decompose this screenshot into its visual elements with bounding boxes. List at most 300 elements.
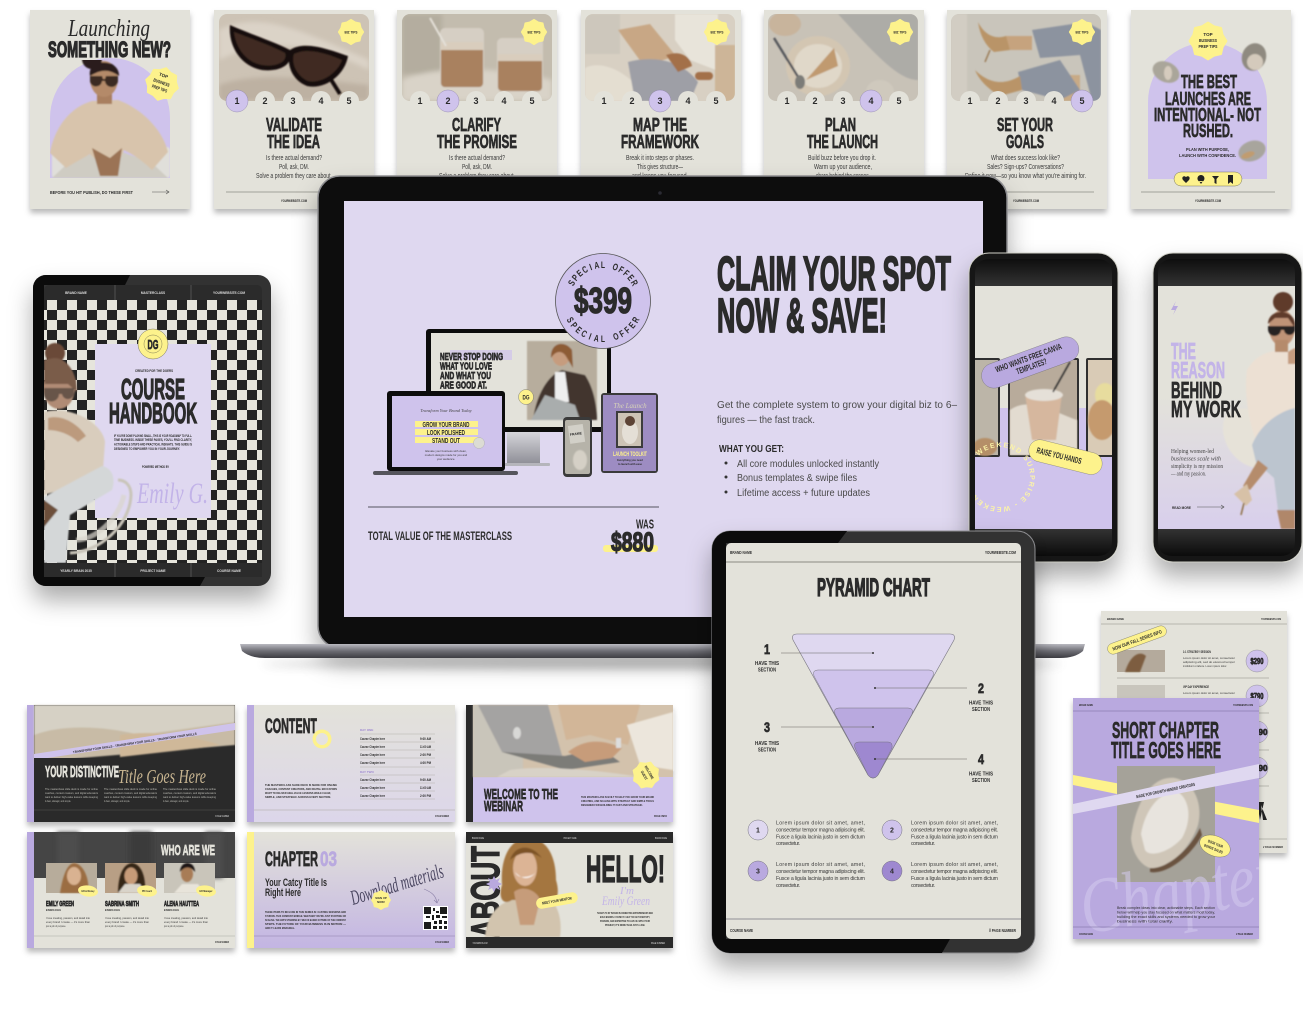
pill: new fall series: NOW OUR FALL SERIES INFO <box>1112 629 1163 653</box>
stamp text top: L <box>601 260 605 270</box>
circular slogan: SE - WEEKEND SURPRISE - WEEKEND <box>975 442 1035 512</box>
heading <box>109 374 197 430</box>
read more link <box>1172 505 1224 510</box>
badge: biz tips <box>888 20 912 44</box>
three text columns <box>45 787 216 803</box>
heading: FRAMEWORK <box>621 132 699 152</box>
signature: I'm <box>619 885 634 897</box>
body text: below will help you stay focused on what matters most today, <box>1117 910 1215 914</box>
body text: share behind the scenes. <box>816 173 870 180</box>
back page: pricing list <box>1101 611 1287 853</box>
was price <box>603 518 658 557</box>
photo: iced coffee glasses <box>402 14 552 101</box>
yellow pill <box>1028 440 1102 475</box>
three text columns: coaches, content creators, and digital educators <box>45 791 98 795</box>
body text: STEPS. THE FUTURE OF YOUR BUSINESS IS IN MOTION — <box>265 922 346 926</box>
body text: business with total clarity. <box>1117 920 1173 924</box>
label 1 <box>755 641 779 674</box>
signature <box>601 885 650 908</box>
mini laptop: your audience. <box>437 457 455 461</box>
label 1: 1 <box>764 641 770 657</box>
label 1: HAVE THIS <box>755 661 779 667</box>
stamp text bottom: F <box>623 325 632 336</box>
team member 1: HR & Money <box>82 889 95 893</box>
heading <box>807 115 878 152</box>
legend item 2: 2 <box>890 828 894 834</box>
mini tablet: The Launch <box>613 402 647 410</box>
heading: MY WORK <box>1171 396 1241 422</box>
back page: pricing list: // PAGE NUMBER <box>1263 845 1284 849</box>
subheading: Right Here <box>265 887 301 899</box>
seal: DG: DG <box>148 337 158 352</box>
top navigation: MASTERCLASS <box>141 291 165 295</box>
panel: slide welcome to the webinar: PAGE INFO <box>654 814 668 818</box>
mini monitor headline <box>440 350 512 392</box>
read more link: READ MORE <box>1172 505 1191 510</box>
stamp text bottom: E <box>627 320 638 331</box>
top navigation: YOURWEBSITE.COM <box>213 291 245 295</box>
bottom navigation <box>44 563 262 577</box>
agenda list: 11:00 AM <box>420 786 431 790</box>
header: YOURWEBSITE.COM <box>985 550 1016 555</box>
row one: adipiscing elit, sed do eiusmod tempor <box>1183 660 1235 664</box>
team member 1: I love creating, passion, and detail into <box>46 916 90 920</box>
step numbers: 3 <box>290 96 296 106</box>
panel: cover social card <box>30 10 190 209</box>
agenda list: 9:00 AM <box>420 778 431 782</box>
agenda list: DAY ONE <box>360 728 373 732</box>
team member 2: just a job of purpose. <box>104 924 125 928</box>
seal: GUEST <box>640 770 648 781</box>
price stamp: $399 <box>574 280 632 321</box>
step numbers: 5 <box>529 96 535 106</box>
mini laptop <box>373 391 518 475</box>
legend item 4: Fusce a ligula lacinia justo in sem dictum <box>911 876 998 882</box>
footer <box>226 192 362 203</box>
heading: BEHIND <box>1171 377 1222 403</box>
team member 1: just a job of purpose. <box>45 924 66 928</box>
stamp text bottom: C <box>579 328 589 340</box>
three text columns: The masterclass slide deck is made for online <box>45 787 98 791</box>
mini laptop: Transform Your Brand Today <box>420 408 472 413</box>
agenda list: Course Chapter here <box>360 745 385 749</box>
mini laptop: modern designs made for you and <box>425 453 468 457</box>
three text columns: want to deliver high-value lessons while keeping <box>45 795 98 799</box>
leader lines <box>781 653 967 759</box>
team member 1 <box>45 863 99 928</box>
heading: SOMETHING NEW? <box>48 37 171 62</box>
mini laptop: Elevate your business with clean, <box>425 449 467 453</box>
step numbers: 4 <box>1051 96 1057 106</box>
footer: // PAGE NUMBER <box>215 940 229 944</box>
badge: biz tips: BIZ TIPS <box>710 30 724 34</box>
cover panel: POWERED METHOD BY <box>142 465 170 469</box>
legend item 3: consectetur tempor magna adipiscing elit. <box>776 869 865 875</box>
stamp text top: O <box>611 262 620 273</box>
body text: THANK'S TO MY PASSION IN CONNECTING ENTREPRENEURS WHO <box>597 911 653 915</box>
seal: NOW! <box>377 900 385 904</box>
mini tablet: to launch with ease <box>618 462 643 466</box>
panel: phone with about post <box>1153 253 1302 562</box>
heading: COURSE <box>121 374 185 406</box>
body text <box>114 434 192 451</box>
header: BRAND NAME <box>730 550 752 555</box>
intro text: COACHES, CONTENT CREATORS, AND DIGITAL EDUCATORS <box>265 787 337 791</box>
stamp text bottom: I <box>587 332 593 342</box>
panel: course handbook tablet <box>33 275 271 586</box>
heading: THE IDEA <box>267 132 320 152</box>
heading: THE LAUNCH <box>807 132 878 152</box>
legend item 2 <box>882 820 998 847</box>
yellow badge: BONUS SALES <box>1203 843 1224 855</box>
heading: HELLO! <box>586 849 665 891</box>
body text <box>439 155 515 180</box>
step numbers <box>594 90 726 112</box>
step numbers: 5 <box>896 96 902 106</box>
badge: top business prep tips: BUSINESS <box>1199 38 1217 43</box>
body text: STUDIOS. THIS COMPANY BRIDGE. WHETHER YOU'RE JUST STARTING OR <box>265 914 347 918</box>
footer <box>592 192 728 203</box>
badge: top business prep tips <box>1190 22 1226 60</box>
step numbers: 1 <box>417 96 423 106</box>
label 4 <box>969 751 993 784</box>
legend item 3: 3 <box>756 868 760 876</box>
team member 3 <box>163 863 217 928</box>
heading: PLAN <box>825 115 856 135</box>
step numbers: 2 <box>629 96 635 106</box>
purple pill: WHO WANTS FREE CANVA <box>994 341 1063 374</box>
panel: closing social card <box>1131 10 1291 209</box>
stamp text top: P <box>570 273 581 283</box>
label 2: 2 <box>978 680 984 696</box>
row one: incididunt ut labore. Lorem ipsum dolor. <box>1183 664 1227 668</box>
seal: SIGN UP <box>375 896 387 900</box>
step numbers: 3 <box>473 96 479 106</box>
three text columns: it clear, strategic, and simple. <box>104 799 130 803</box>
panel: slide who are we <box>27 832 235 948</box>
body text: Define it now—so you know what you're aiming for. <box>965 173 1086 180</box>
label 3: HAVE THIS <box>755 741 779 747</box>
team member 3: just a job of purpose. <box>163 924 184 928</box>
body text: Sales? Sign-ups? Conversations? <box>987 164 1064 171</box>
camera <box>658 191 662 195</box>
team member 1: every brand I create — it's more than <box>46 920 90 924</box>
body text: What does success look like? <box>991 155 1060 162</box>
bottom bar <box>466 937 673 948</box>
slide heading: NOW & SAVE! <box>717 290 887 343</box>
bottom bar: YOURWEBSITE.COM <box>472 941 488 945</box>
step numbers: 3 <box>657 96 663 106</box>
three text columns: The masterclass slide deck is made for online <box>163 787 216 791</box>
agenda list: DAY TWO <box>360 770 375 774</box>
mini monitor photo <box>527 341 597 420</box>
body text: Break complex ideas into clear, actionable steps. Each section <box>1117 906 1215 910</box>
row one <box>1117 650 1268 672</box>
intro text: THE MASTERCLASS SLIDE DECK IS MADE FOR ONLINE <box>265 783 337 787</box>
mini monitor <box>426 329 611 466</box>
what you get list: Lifetime access + future updates <box>737 488 870 499</box>
heading: CONTENT <box>265 715 317 738</box>
signature: Emily G. <box>136 477 208 510</box>
body text: Poll, ask, DM. <box>279 164 309 171</box>
badge: biz tips: BIZ TIPS <box>344 30 358 34</box>
heading <box>1171 342 1242 418</box>
step numbers <box>960 90 1093 112</box>
team member 3: I love creating, passion, and detail into <box>164 916 208 920</box>
mini tablet: LAUNCH TOOLKIT <box>613 452 647 458</box>
heading <box>621 115 699 152</box>
legend item 2: consectetur tempor magna adipiscing elit. <box>911 828 998 834</box>
legend item 3: Lorem ipsum dolor sit amet, amet, <box>776 862 865 868</box>
photo tiles <box>975 358 1112 457</box>
body text: Is there actual demand? <box>449 155 505 162</box>
photo: plate with cake <box>768 12 918 104</box>
body text <box>1117 906 1216 924</box>
bottom navigation: COURSE NAME <box>217 569 241 573</box>
badge: top business prep tips: PREP TIPS <box>151 84 168 94</box>
legend item 1: Lorem ipsum dolor sit amet, amet, <box>776 820 865 826</box>
legend item 1 <box>748 820 865 847</box>
heading <box>1154 72 1261 141</box>
team member 3: BUSINESS COACH <box>164 908 179 912</box>
front page: chapter title: COURSE NAME <box>1079 932 1093 936</box>
agenda list <box>360 728 435 799</box>
step numbers: 5 <box>346 96 352 106</box>
top bar <box>466 832 673 843</box>
badge: biz tips: BIZ TIPS <box>894 30 907 34</box>
stamp text bottom <box>564 315 642 344</box>
yellow pill: RAISE YOU HANDS <box>1036 445 1083 466</box>
body text: BUILD BRANDS. I FOUND IT. I HELP YOU GET CREATIVITY, <box>600 915 650 919</box>
step numbers: 4 <box>685 96 691 106</box>
step numbers: 1 <box>601 96 607 106</box>
offer description <box>717 400 957 426</box>
footer: YOURWEBSITE.COM <box>1013 199 1039 203</box>
phone screen <box>975 286 1112 529</box>
side strip <box>247 832 254 948</box>
step numbers: 4 <box>868 96 874 106</box>
heading <box>45 764 206 788</box>
mini seal: DG <box>522 394 530 402</box>
heading <box>484 786 558 815</box>
heading <box>437 115 517 152</box>
team member 1: EMILY GREEN <box>46 901 74 908</box>
step numbers: 2 <box>995 96 1001 106</box>
body text: PROJECT, IT'S MORE THAN JUST A JOB. <box>605 923 645 927</box>
chart title: PYRAMID CHART <box>817 574 930 602</box>
step numbers <box>777 90 909 112</box>
body text: Helping women-led <box>1171 448 1215 455</box>
heading: 03 <box>320 848 337 871</box>
mini laptop: GROW YOUR BRAND <box>422 420 470 429</box>
heading: THE <box>1171 338 1196 364</box>
bottom navigation: YEARLY BRAIN 2035 <box>60 569 92 573</box>
laptop body <box>318 176 1007 648</box>
stamp text bottom: O <box>612 331 621 343</box>
label 4: 4 <box>978 751 984 767</box>
lavender arch <box>1148 43 1267 179</box>
legend item 4: consectetur tempor magna adipiscing elit. <box>911 869 998 875</box>
bolt icon <box>1171 301 1178 315</box>
top bar: BRAND NAME <box>472 836 484 840</box>
body text: CREATING, AND SCALING WITH STRATEGY AND SIMPLE TOOLS <box>581 799 654 803</box>
photo: seated woman in heels <box>1223 292 1297 529</box>
label 3 <box>755 719 779 754</box>
row one: Lorem ipsum dolor sit amet, consectetur <box>1183 656 1235 660</box>
panel: slide welcome to the webinar <box>466 705 673 822</box>
legend item 4: Lorem ipsum dolor sit amet, amet, <box>911 862 998 868</box>
body text <box>256 155 332 180</box>
front page: chapter title: YOURWEBSITE.COM <box>1233 703 1253 707</box>
photo: laptop on lap <box>585 14 735 101</box>
agenda list: Course Chapter here <box>360 761 385 765</box>
body text <box>597 911 653 927</box>
legend item 3: Fusce a ligula lacinia justo in sem dictum <box>776 876 865 882</box>
lavender band: MADE FOR GROWTH-MINDED CREATORS <box>1136 782 1196 799</box>
heading: MAP THE <box>633 115 687 135</box>
body text <box>965 155 1086 180</box>
top navigation <box>65 285 245 300</box>
body text: — and my passion. <box>1170 470 1206 478</box>
badge: top business prep tips: PREP TIPS <box>1198 44 1218 49</box>
what you get list: WHAT YOU GET: <box>719 444 784 455</box>
intro text <box>265 783 337 799</box>
heading: WHO ARE WE <box>161 842 215 859</box>
team member 2: SABRINA SMITH <box>105 901 139 908</box>
three text columns: it clear, strategic, and simple. <box>163 799 189 803</box>
team member 3: ALENA HAUTTEA <box>164 901 199 908</box>
mini tablet <box>601 393 658 473</box>
stamp text bottom: S <box>564 316 576 325</box>
yellow badge <box>1196 831 1234 861</box>
stamp text top: F <box>621 268 631 279</box>
top bar: BRAND NAME <box>655 836 667 840</box>
back page: pricing list: 90 <box>1259 728 1268 737</box>
stamp text top: I <box>588 262 593 272</box>
agenda list: 9:00 AM <box>420 737 431 741</box>
body text: LAUNCH WITH CONFIDENCE. <box>1179 153 1236 158</box>
label 3: 3 <box>764 719 770 735</box>
photo: sunglasses <box>219 14 369 101</box>
diagonal band: TRANSFORM YOUR SKILLS - TRANSFORM YOUR SKILLS - TRANSFORM YOUR SKILLS <box>73 732 197 754</box>
label 3: SECTION <box>758 748 776 754</box>
total value row: TOTAL VALUE OF THE MASTERCLASS <box>368 531 512 543</box>
heading <box>997 115 1053 152</box>
footer <box>775 192 911 203</box>
step numbers: 2 <box>262 96 268 106</box>
team member 2 <box>104 863 158 928</box>
legend item 1: consectetur. <box>776 841 800 847</box>
step numbers: 5 <box>713 96 719 106</box>
body text: THIS MASTERCLASS IS BUILT TO HELP YOU GROW YOUR BRAND <box>581 795 655 799</box>
QR code <box>423 906 448 930</box>
laptop screen <box>344 201 983 617</box>
vertical heading: ABOUT <box>464 846 508 938</box>
photo: smiling woman <box>485 838 561 937</box>
bottom navigation: PROJECT NAME <box>140 569 166 573</box>
body text: Is there actual demand? <box>266 155 322 162</box>
stamp text top: E <box>575 268 585 279</box>
footer <box>409 192 545 203</box>
step numbers: 1 <box>234 96 240 106</box>
body text: IF YOU'RE DONE PLAYING SMALL, THIS IS YOUR ROADMAP TO FULL- <box>114 434 192 438</box>
star accent <box>486 876 502 892</box>
panel: pyramid chart tablet <box>712 531 1035 953</box>
heading: WEBINAR <box>484 798 523 815</box>
yellow pill: MEET YOUR MENTOR <box>542 896 572 906</box>
footer: YOURWEBSITE.COM <box>464 199 490 203</box>
body text: and keeps you focused. <box>632 173 688 180</box>
mini monitor headline: ARE GOOD AT. <box>440 380 487 392</box>
body text: PASSION, AND EXPERTISE TO LIVE IN. WITH YOUR <box>600 919 651 923</box>
panel: phone with carousel <box>954 252 1134 592</box>
body text: Warm up your audience, <box>814 164 872 171</box>
row one: 1:1 STRATEGY SESSION <box>1183 650 1211 654</box>
step numbers: 2 <box>812 96 818 106</box>
stamp text top: E <box>625 273 636 283</box>
yellow band <box>1073 775 1259 823</box>
lavender arch <box>50 58 170 178</box>
agenda list: Course Chapter here <box>360 737 385 741</box>
footer: // PAGE NUMBER <box>215 814 229 818</box>
heading: Title Goes Here <box>118 766 206 788</box>
body text <box>626 155 694 180</box>
arrow <box>424 889 439 903</box>
subheading <box>265 877 327 899</box>
photo: woman in sweater <box>50 49 170 178</box>
row two: $790 <box>1250 692 1264 701</box>
yellow badge: BOOK YOUR <box>1207 839 1224 849</box>
what you get list <box>719 444 879 499</box>
panel: card 3 map the framework <box>578 10 744 176</box>
body text: ACTIONABLE STEPS AND PRACTICAL INSIGHTS. THIS GUIDE IS <box>114 442 192 446</box>
top navigation: BRAND NAME <box>65 291 87 295</box>
stamp text bottom: F <box>618 328 626 340</box>
checkerboard background <box>44 300 262 563</box>
seal <box>629 758 663 792</box>
lavender band <box>1073 764 1259 814</box>
photo: sofa <box>34 705 235 763</box>
badge: biz tips: BIZ TIPS <box>1076 30 1089 34</box>
back page: pricing list: 90 <box>1259 764 1268 773</box>
agenda list: 2:00 PM <box>420 794 431 798</box>
panel: card 1 validate the idea <box>214 10 374 209</box>
price stamp <box>556 254 650 348</box>
heading: REASON <box>1171 357 1225 383</box>
body text: Solve a problem they care about. <box>439 173 515 180</box>
icon row pill <box>1174 172 1242 186</box>
body text <box>808 155 876 180</box>
label 1: SECTION <box>758 668 776 674</box>
stamp text bottom: A <box>593 333 600 344</box>
footer <box>1141 192 1275 203</box>
step numbers: 4 <box>318 96 324 106</box>
legend item 4: consectetur. <box>911 883 935 889</box>
pill: new fall series <box>1106 624 1168 656</box>
legend item 4: 4 <box>890 868 894 876</box>
side strip <box>247 705 254 822</box>
laptop base <box>240 644 1085 668</box>
label 2: HAVE THIS <box>969 700 993 706</box>
back page: pricing list: YOURWEBSITE.COM <box>1261 617 1281 621</box>
agenda list: Course Chapter here <box>360 794 385 798</box>
body text: This gives structure— <box>637 164 683 171</box>
body text: DESIGNED TO EMPOWER YOU IN YOUR JOURNEY. <box>114 447 180 451</box>
agenda list: Course Chapter here <box>360 786 385 790</box>
body text: TIME BUSINESS. INSIDE THESE PAGES, YOU'LL FIND CLARITY, <box>114 438 192 442</box>
legend item 1: consectetur tempor magna adipiscing elit. <box>776 828 865 834</box>
what you get list: All core modules unlocked instantly <box>737 459 879 470</box>
